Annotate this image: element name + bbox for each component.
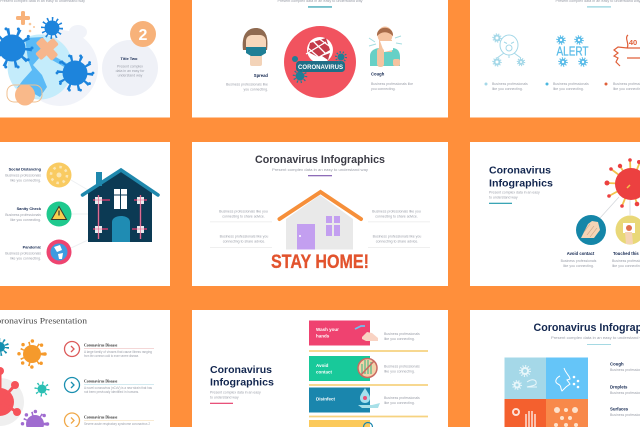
connector lines (600, 197, 630, 218)
subtitle: Present complex data in an easy to understand way (551, 336, 640, 340)
icon: orange virus (19, 341, 45, 367)
title: Coronavirus Infographics (255, 154, 385, 166)
icon: small teal virus (36, 383, 48, 395)
text block: right top: Business professionals like you (372, 210, 421, 214)
item: social distancing: Social Distancing (9, 166, 42, 172)
list item: orange: Severe acute respiratory syndrome coronavirus 2 (84, 422, 150, 426)
callout: title two: data in an easy for (116, 69, 145, 73)
text block: right bottom (368, 234, 430, 248)
subtitle (489, 190, 540, 200)
list item: teal: not been previously identified in humans. (84, 390, 139, 394)
icon: purple virus (22, 412, 48, 427)
title (489, 164, 553, 190)
callout: title two: understand way (118, 74, 143, 78)
title (210, 364, 274, 388)
icon: virus (604, 158, 640, 208)
text block: left bottom (210, 234, 272, 248)
icon: fever head: 40 (629, 38, 637, 47)
legend row (484, 82, 640, 91)
subtitle: Present complex data in an easy to understand way (272, 168, 368, 172)
panel: coronavirus presentation slide (0, 310, 170, 427)
label: surfaces (610, 406, 640, 417)
text block: right top (368, 210, 430, 222)
panel: transmission grid slide (470, 310, 640, 427)
headline: stay home: STAY HOME! (271, 251, 369, 273)
illustration: grey house (280, 192, 361, 250)
label: cough: Cough (610, 362, 624, 366)
list item: red (64, 342, 154, 358)
title: Coronavirus (489, 164, 551, 176)
text block: left top: Business professionals like you (219, 210, 268, 214)
step: disinfect: Business professionals (384, 396, 420, 400)
step: yellow (309, 420, 372, 427)
label: cough (371, 72, 413, 91)
teal rule (489, 203, 512, 204)
list item: orange (64, 413, 154, 427)
list item: red: A large family of viruses that cause illness ranging (84, 350, 152, 354)
list item: teal: A novel coronavirus (nCoV) is a new strain that has (84, 386, 152, 390)
callout: title two: Title Two (121, 56, 138, 61)
item: pandemic: Business professionals (5, 252, 41, 256)
title: Coronavirus (210, 364, 272, 376)
illustration: globe with viruses (0, 11, 98, 106)
item: sanity check: Business professionals (5, 213, 41, 217)
legend row: like you connecting. (492, 87, 523, 91)
item: pandemic: like you connecting. (10, 256, 41, 260)
yellow separators (309, 351, 428, 416)
legend row: Business professionals (553, 82, 589, 86)
icon: washing hands (576, 215, 606, 245)
grid tile: surfaces (504, 399, 546, 427)
panel: avoid contact slide (470, 142, 640, 286)
step: avoid contact: Avoid (316, 363, 329, 368)
step: wash your hands: Wash your (316, 327, 339, 332)
icon: man with mask (243, 28, 267, 66)
step: wash your hands: like you connecting. (384, 337, 415, 341)
badge: coronavirus (284, 26, 356, 98)
text block: right top: connecting to share advice. (375, 214, 418, 218)
legend row: Business professionals (492, 82, 528, 86)
text block: left top (210, 210, 272, 222)
label: cough: you connecting. (371, 87, 396, 91)
item: pandemic (5, 240, 72, 264)
list item: teal (64, 378, 154, 394)
panel: title two slide (0, 0, 170, 118)
label: spread: Business professionals like (226, 82, 268, 86)
label: droplets (610, 384, 640, 395)
text block: left bottom: Business professionals like you (220, 234, 268, 238)
connector lines (71, 180, 88, 248)
icon: man coughing (369, 26, 402, 67)
grid tile: cough (504, 358, 546, 399)
legend row: like you connecting. (553, 87, 584, 91)
label: cough (610, 362, 640, 372)
item: social distancing: Business professionals (5, 174, 41, 178)
label: avoid contact (561, 251, 597, 268)
item: pandemic: Pandemic (23, 244, 42, 250)
item: sanity check: like you connecting. (10, 218, 41, 222)
subtitle: to understand way (210, 396, 239, 400)
label: cough: Cough (371, 72, 385, 76)
subtitle and rule (556, 0, 640, 8)
step: avoid contact: contact (316, 370, 333, 374)
subtitle: Present complex data in an easy (489, 190, 540, 194)
step: wash your hands (309, 320, 420, 346)
subtitle: Present complex data in an easy (210, 390, 261, 394)
text block: left top: connecting to share advice. (222, 214, 265, 218)
label: spread (226, 73, 268, 92)
list item: red: Coronavirus Disease (84, 344, 118, 348)
label: avoid contact: Business professionals (561, 259, 597, 263)
callout: title two: 2 (139, 27, 148, 44)
label: touched this: Touched this (613, 251, 639, 256)
subtitle: to understand way (489, 196, 518, 200)
icon: big red virus (0, 367, 24, 426)
grid tile: droplets (546, 358, 588, 399)
item: social distancing: like you connecting. (10, 178, 41, 182)
step: wash your hands: Business professionals (384, 332, 420, 336)
icon: fever head (614, 35, 640, 66)
step: avoid contact: like you connecting. (384, 370, 415, 374)
title: Infographics (489, 178, 553, 190)
text block: left bottom: connecting to share advice. (223, 240, 265, 244)
label: spread: Spread (254, 73, 268, 78)
icon: touched (616, 216, 640, 244)
callout: title two (102, 21, 158, 96)
badge: coronavirus: CORONAVIRUS (298, 65, 343, 71)
panel: alert icons slide (470, 0, 640, 118)
step: avoid contact (309, 356, 420, 381)
icon: alert (556, 36, 589, 66)
pink rule (210, 403, 233, 404)
label: spread: you connecting. (243, 88, 268, 92)
title: Infographics (210, 376, 274, 388)
label: avoid contact: Avoid contact (567, 251, 595, 256)
step: disinfect: like you connecting. (384, 401, 415, 405)
label: touched this (612, 251, 640, 268)
purple rule (308, 175, 332, 176)
subtitle and rule (278, 0, 363, 8)
panel: house with list slide (0, 142, 170, 286)
item: sanity check: Sanity Check (17, 206, 42, 211)
label: avoid contact: like you connecting. (563, 264, 594, 268)
item: social distancing (5, 162, 72, 188)
icon: sick face (493, 34, 524, 66)
text block: right bottom: connecting to share advice. (376, 240, 418, 244)
list item: orange: Coronavirus Disease (84, 416, 118, 420)
icon: teal virus (0, 340, 7, 354)
label: surfaces: Surfaces (610, 406, 629, 412)
step: wash your hands: hands (316, 334, 330, 338)
step: disinfect: Disinfect (316, 396, 336, 402)
item: sanity check (5, 202, 72, 226)
step: avoid contact: Business professionals (384, 364, 420, 368)
panel: spread and cough slide (192, 0, 448, 118)
icon: alert: ALERT (556, 44, 589, 58)
label: cough: Business professionals like (371, 82, 413, 86)
illustration: house (82, 170, 158, 242)
list item: red: from the common cold to more severe disease. (84, 354, 139, 358)
subtitle (210, 390, 261, 400)
step: disinfect (309, 388, 420, 412)
grid tile: people (546, 399, 588, 427)
teal rule (587, 343, 611, 346)
text block: right bottom: Business professionals like you (373, 234, 421, 238)
panel: stay home slide (192, 142, 448, 286)
list item: teal: Coronavirus Disease (84, 380, 118, 384)
panel: hygiene steps slide (192, 310, 448, 427)
callout: title two: Present complex (117, 64, 143, 68)
label: droplets: Droplets (610, 384, 628, 390)
